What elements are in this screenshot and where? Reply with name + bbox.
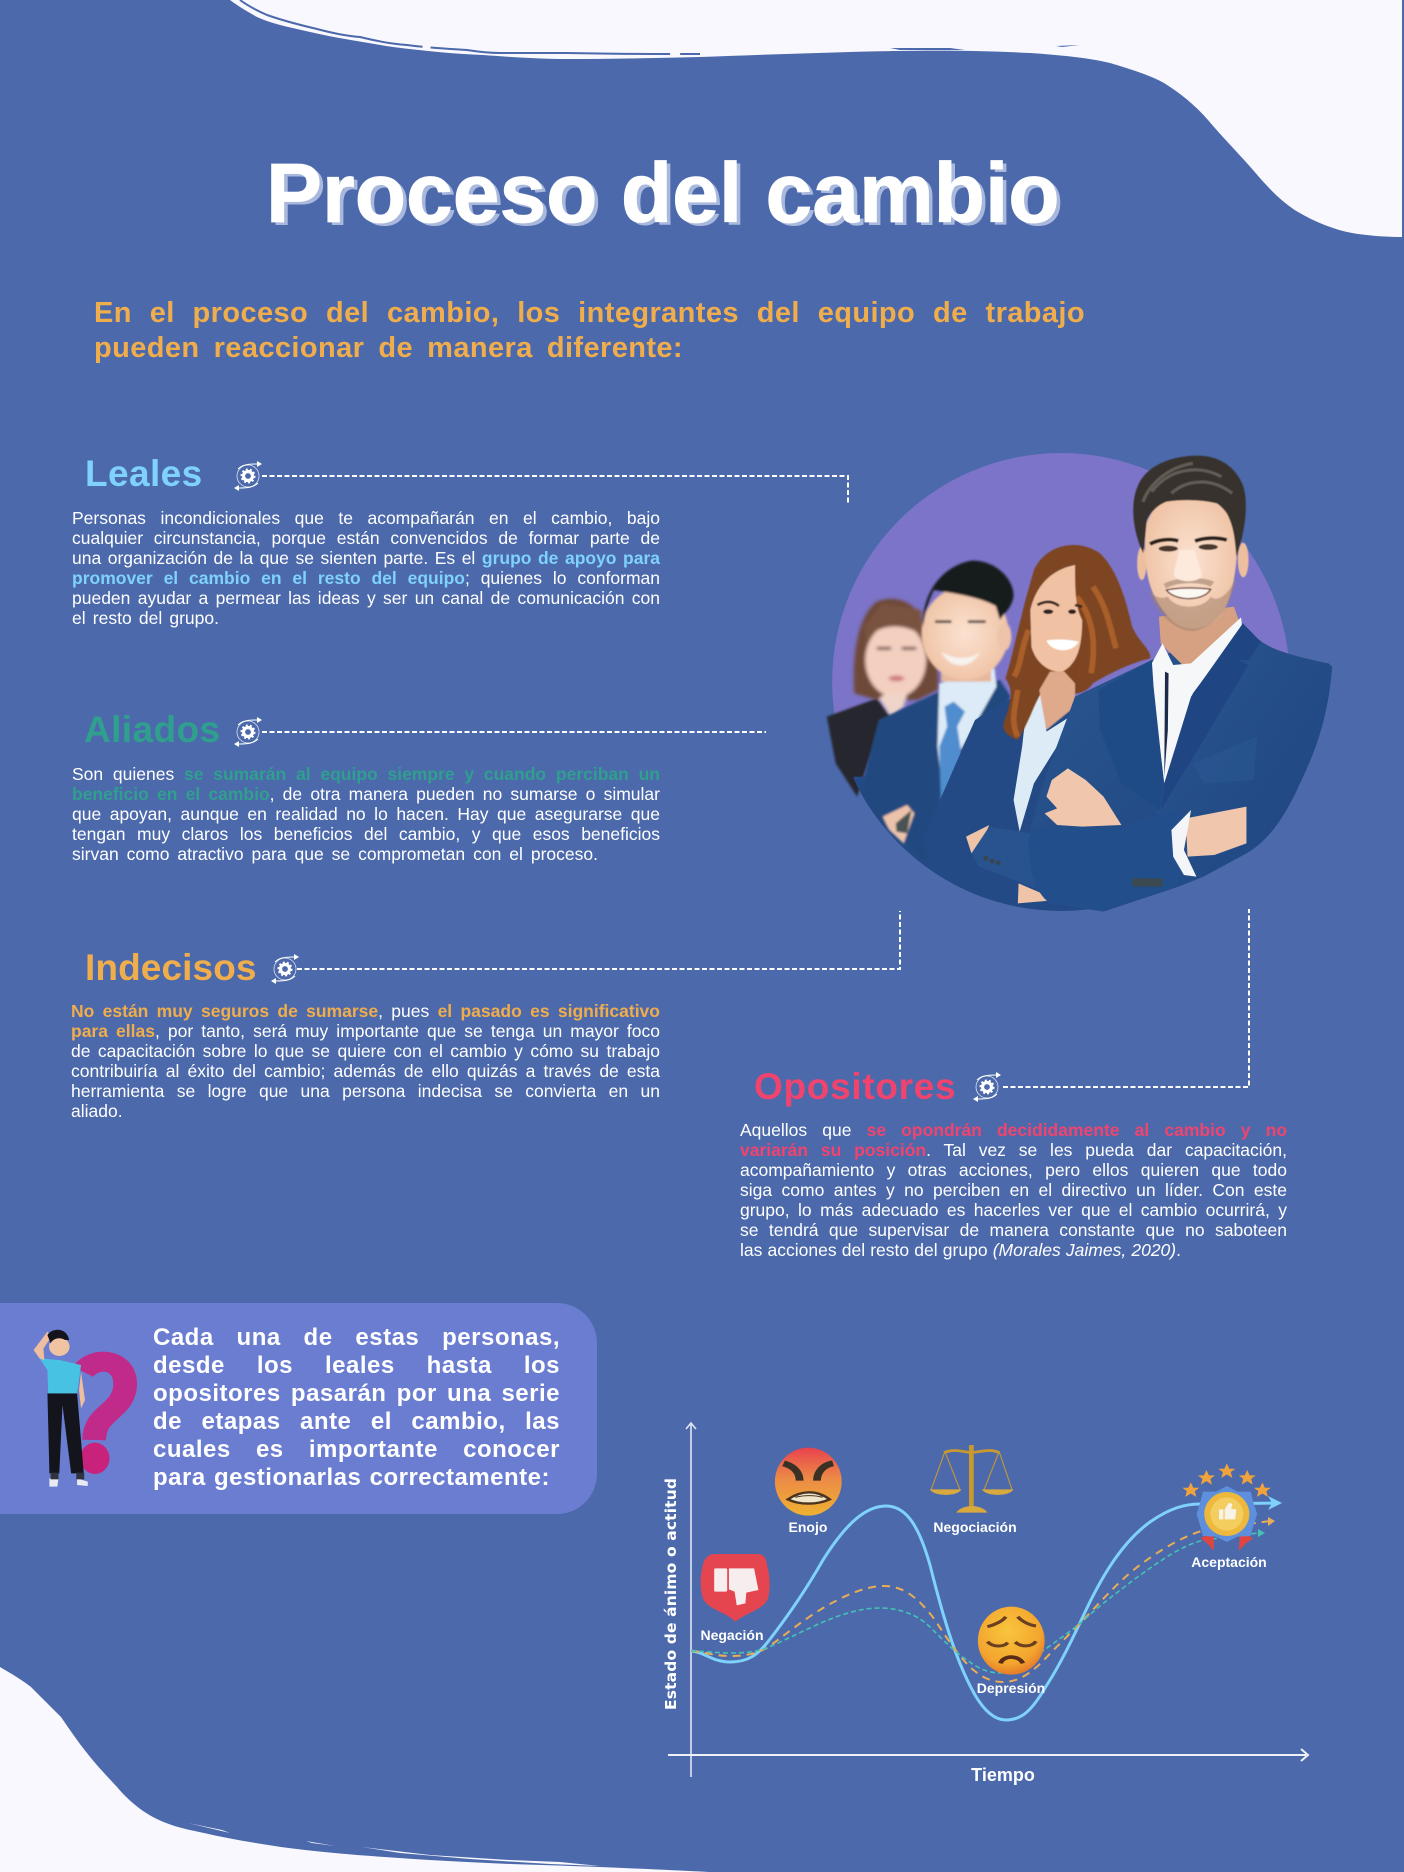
back woman jacket — [827, 698, 923, 797]
icon: gear Opositores — [973, 1072, 1001, 1102]
callout text: de etapas ante el cambio, las — [153, 1408, 560, 1435]
text block: Opositores: Aquellos que se opondrán decididamente al cambio y no — [740, 1120, 1287, 1140]
text block: Leales: una organización de la que se sienten parte. Es el grupo de apoyo para — [72, 548, 660, 568]
text block: Aliados: Son quienes se sumarán al equipo siempre y cuando perciban un — [72, 764, 660, 784]
chart labels — [662, 1478, 1267, 1785]
heading: Indecisos: Indecisos — [85, 947, 257, 988]
icon: angry face — [775, 1448, 842, 1516]
text block: Indecisos: de capacitación sobre lo que se quiere con el cambio y cómo su trabajo — [71, 1041, 660, 1061]
heading: Leales: Leales — [85, 453, 203, 494]
front man jacket — [1040, 624, 1288, 901]
line chart: stages of change — [662, 1423, 1308, 1785]
text block: Opositores: grupo, lo más adecuado es hacerles ver que el cambio ocurrirá, y — [740, 1200, 1287, 1220]
callout text: cuales es importante conocer — [153, 1436, 560, 1463]
dashed connector: Aliados — [262, 731, 766, 733]
chart labels: Estado de ánimo o actitud — [662, 1478, 680, 1710]
text block: Aliados: que apoyan, aunque en realidad no lo hacen. Hay que asegurarse que — [72, 804, 660, 824]
text block: Aliados: sirvan como atractivo para que se comprometan con el proceso. — [72, 844, 598, 864]
text block: Leales: el resto del grupo. — [72, 608, 219, 628]
text block: Leales: promover el cambio en el resto del equipo; quienes lo conforman — [72, 568, 660, 588]
chart labels: Negociación — [933, 1519, 1017, 1535]
chart labels: Negación — [700, 1627, 764, 1643]
dashed connector: Opositores — [1003, 909, 1249, 1087]
icon: sad face — [978, 1607, 1045, 1675]
callout text: para gestionarlas correctamente: — [153, 1464, 550, 1491]
text block: Opositores — [740, 1120, 1287, 1260]
curve: leales (solid) — [691, 1496, 1282, 1720]
icon: gear Leales — [234, 461, 262, 491]
text block: Indecisos — [71, 1001, 660, 1121]
title: Proceso del cambio — [266, 146, 1060, 240]
intro text — [94, 297, 1085, 364]
text block: Aliados: beneficio en el cambio, de otra manera pueden no sumarse o simular — [72, 784, 660, 804]
icon: gear Aliados — [234, 717, 262, 747]
dashed connector: Indecisos — [297, 911, 900, 969]
crossed arms — [1029, 812, 1179, 912]
dashed connector: Leales — [262, 476, 848, 505]
callout text — [153, 1324, 560, 1491]
text block: Opositores: variarán su posición. Tal vez se les pueda dar capacitación, — [740, 1140, 1287, 1160]
curve: aliados (teal dashed) — [691, 1529, 1265, 1673]
curve: indecisos (orange dashed) — [691, 1517, 1275, 1682]
chart labels: Depresión — [977, 1680, 1045, 1696]
chart labels: Enojo — [789, 1519, 827, 1535]
text block: Opositores: siga como antes y no perciben en el directivo un líder. Con este — [740, 1180, 1287, 1200]
text block: Leales: cualquier circunstancia, porque están convencidos de formar parte de — [72, 528, 660, 548]
text block: Leales: pueden ayudar a permear las ideas y ser un canal de comunicación con — [72, 588, 660, 608]
intro text: pueden reaccionar de manera diferente: — [94, 332, 683, 364]
x axis — [668, 1749, 1308, 1761]
illustration: confused man and question mark — [34, 1330, 125, 1487]
text block: Indecisos: contribuiría al éxito del cambio; además de ello quizás a través de esta — [71, 1061, 660, 1081]
icon: gear Indecisos — [271, 954, 299, 984]
photo: team of four people in a purple circle — [827, 453, 1332, 917]
text block: Opositores: se tendrá que supervisar de manera constante que no saboteen — [740, 1220, 1287, 1240]
text block: Aliados — [72, 764, 660, 864]
text block: Leales: Personas incondicionales que te acompañarán en el cambio, bajo — [72, 508, 660, 528]
brush streaks along top edge — [240, 0, 700, 54]
text block: Indecisos: herramienta se logre que una persona indecisa se convierta en un — [71, 1081, 660, 1101]
text block: Opositores: las acciones del resto del grupo (Morales Jaimes, 2020). — [740, 1240, 1181, 1260]
chart icons drawn in scaled coordinates — [701, 1445, 1271, 1675]
icon: medal with stars — [1182, 1463, 1271, 1551]
y axis — [686, 1423, 696, 1777]
icon: thumbs down — [701, 1554, 770, 1622]
icon: balance scale — [930, 1445, 1013, 1513]
callout text: Cada una de estas personas, — [153, 1324, 560, 1351]
chart labels: Tiempo — [971, 1765, 1035, 1785]
woman hair — [1003, 545, 1150, 740]
text block: Indecisos: No están muy seguros de sumarse, pues el pasado es significativo — [71, 1001, 660, 1021]
text block: Aliados: tengan muy claros los beneficios del cambio, y que esos beneficios — [72, 824, 660, 844]
text block: Leales — [72, 508, 660, 628]
chart labels: Aceptación — [1191, 1554, 1267, 1570]
callout panel — [0, 1303, 597, 1514]
callout text: opositores pasarán por una serie — [153, 1380, 560, 1407]
heading: Aliados: Aliados — [84, 709, 220, 750]
brush shape: bottom left corner — [0, 1667, 709, 1872]
callout text: desde los leales hasta los — [153, 1352, 560, 1379]
text block: Indecisos: para ellas, por tanto, será muy importante que se tenga un mayor foco — [71, 1021, 660, 1041]
intro text: En el proceso del cambio, los integrantes del equipo de trabajo — [94, 297, 1085, 329]
brush shape: top right corner — [230, 0, 1402, 237]
text block: Opositores: acompañamiento y otras acciones, pero ellos quieren que todo — [740, 1160, 1287, 1180]
heading: Opositores: Opositores — [754, 1066, 956, 1107]
text block: Indecisos: aliado. — [71, 1101, 123, 1121]
